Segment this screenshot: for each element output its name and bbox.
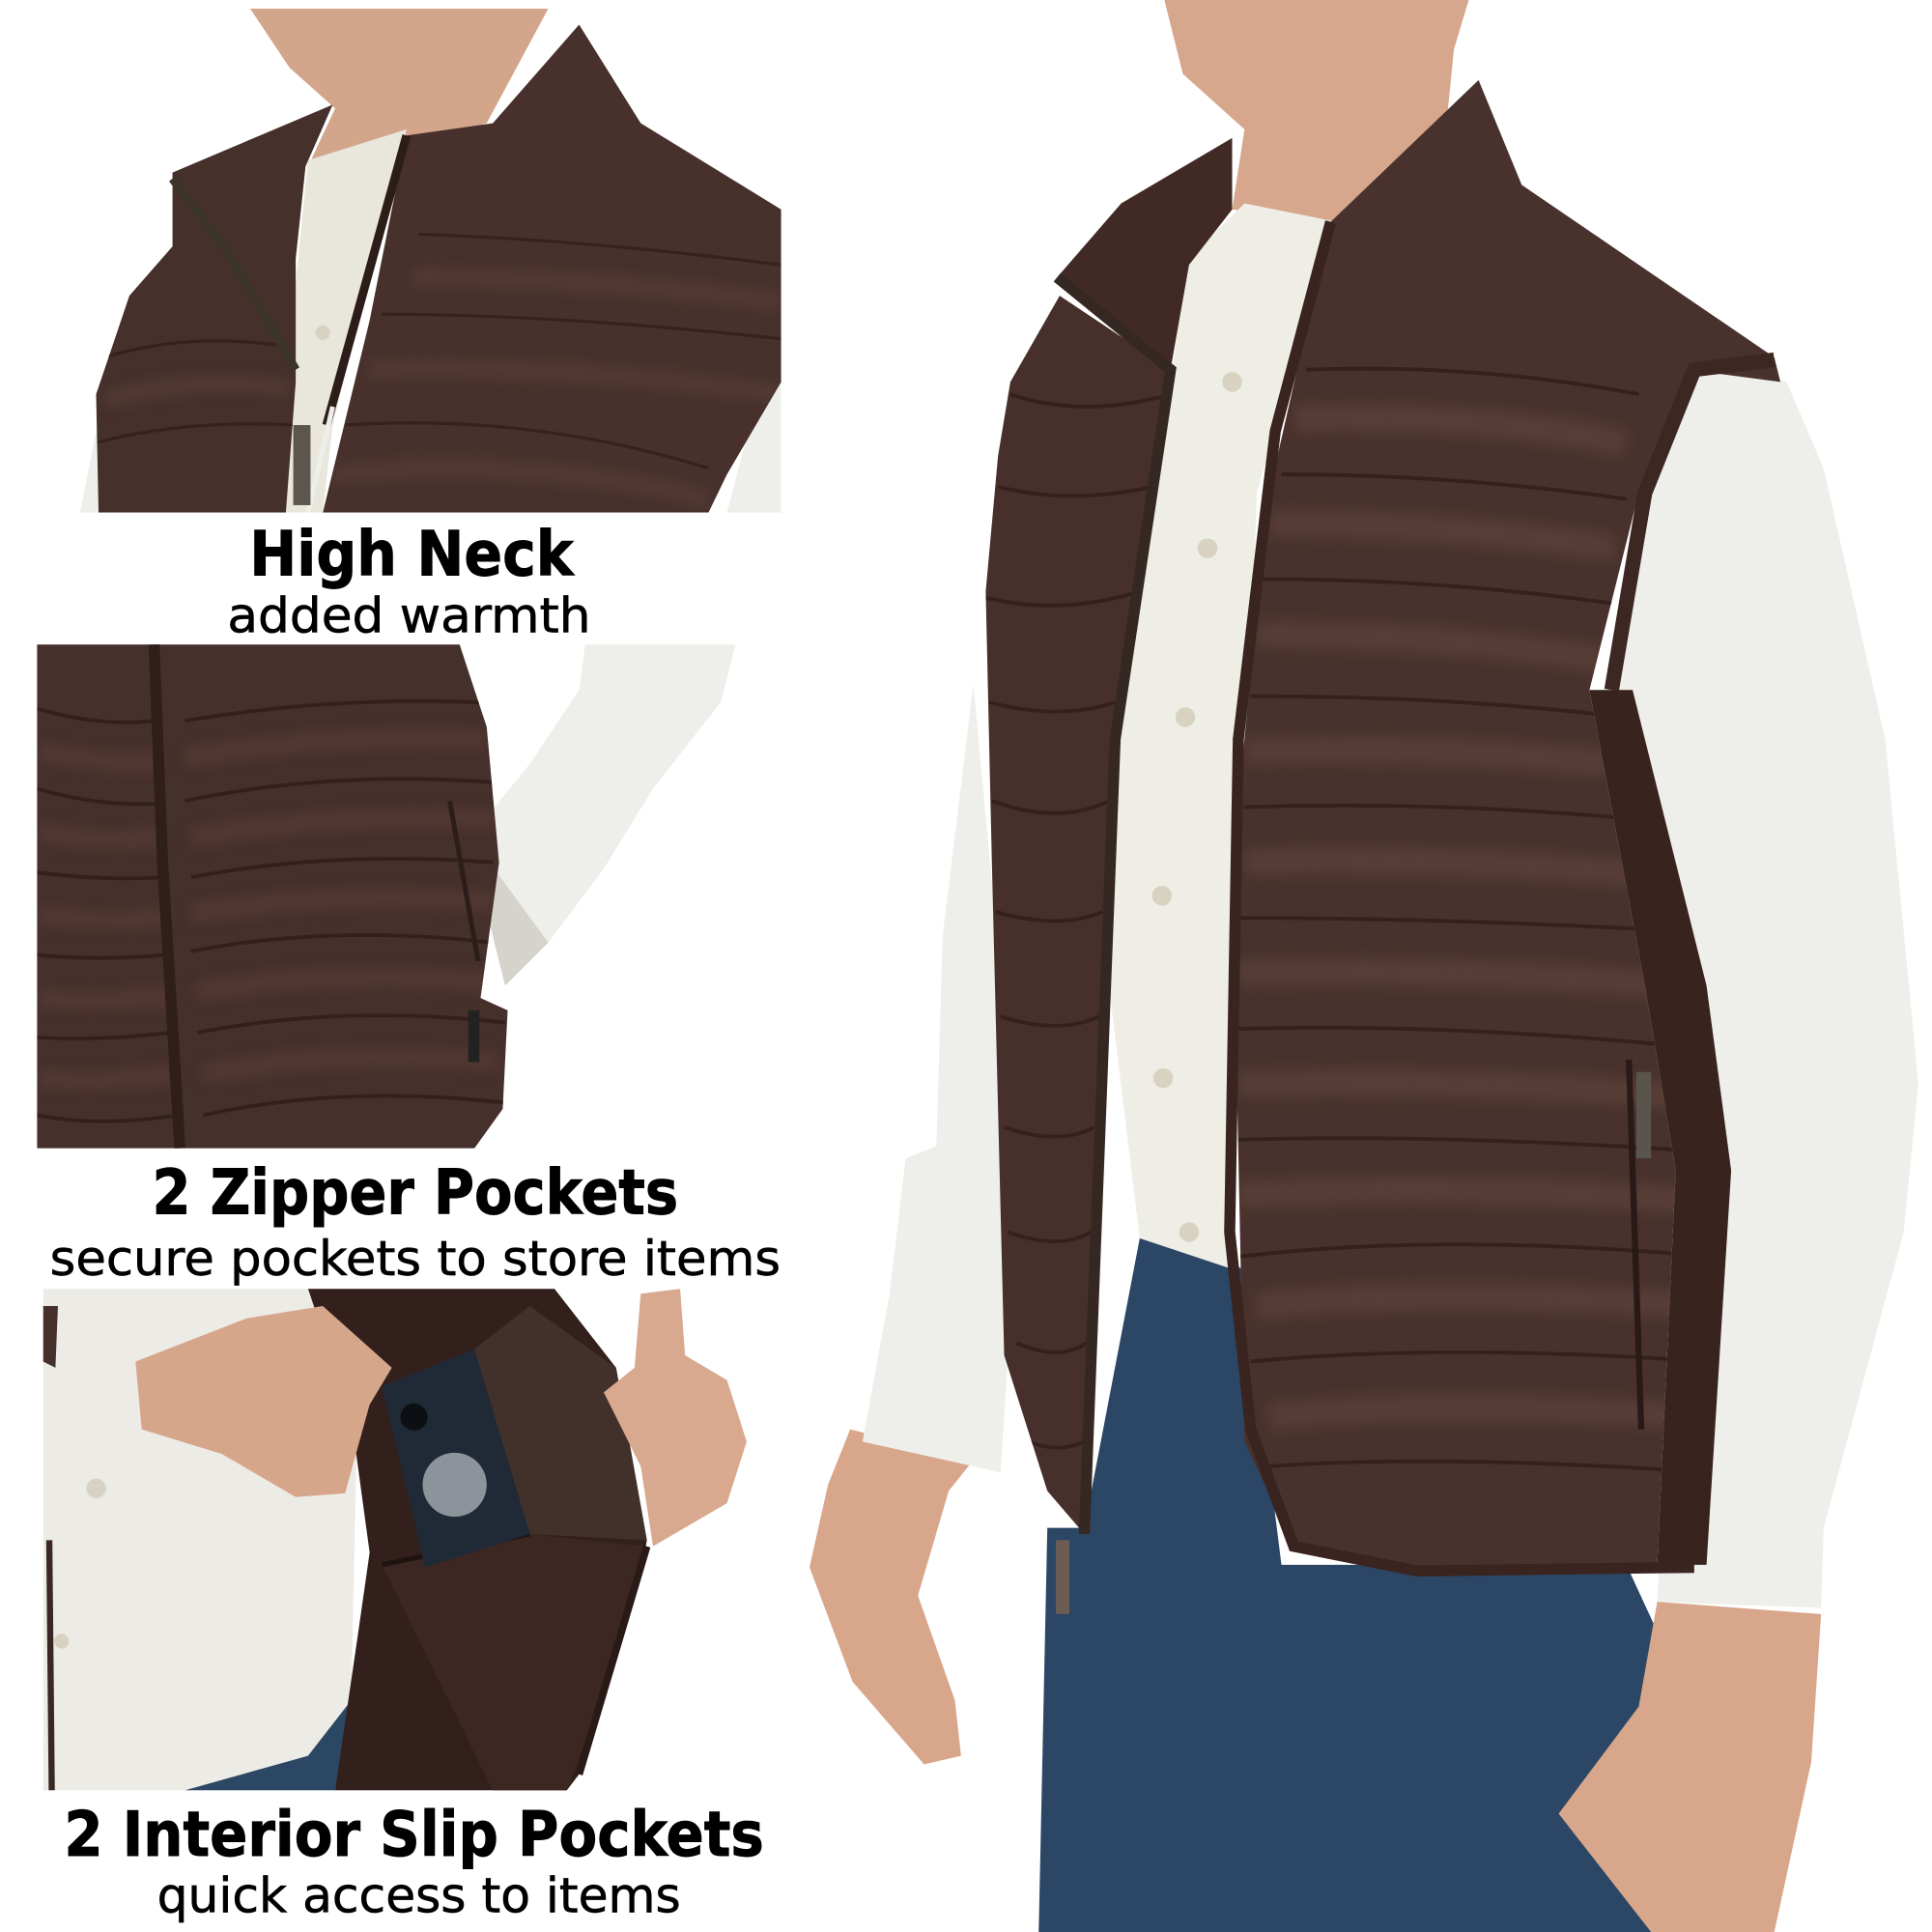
vest left panel [985, 296, 1171, 1534]
pocket zipper [1629, 1060, 1641, 1430]
heading: zipper pockets: 2 Zipper Pockets [153, 1157, 678, 1229]
left hand [810, 1430, 974, 1765]
quilting [985, 369, 1713, 1472]
heading: high neck: High Neck [249, 520, 575, 591]
icon: phone [382, 1350, 529, 1567]
left sleeve [863, 684, 1016, 1472]
right hand [1559, 1602, 1821, 1932]
vest side panel [1589, 690, 1731, 1565]
zippers [1230, 222, 1694, 1571]
panel: high neck photo [80, 9, 781, 513]
text: quick access: quick access to items [157, 1868, 681, 1924]
vest right panel [1233, 80, 1780, 1571]
heading: interior slip pockets: 2 Interior Slip Pockets [64, 1800, 764, 1871]
panel: main model photo [810, 0, 1918, 1932]
right sleeve [1608, 363, 1918, 1608]
shirt front [1109, 203, 1337, 1269]
hem zipper pull [1056, 1540, 1069, 1614]
jeans [1038, 1238, 1707, 1932]
face and neck [1164, 0, 1468, 222]
panel: zipper pockets photo [37, 644, 735, 1149]
collar left [1057, 138, 1233, 370]
text: secure pockets: secure pockets to store items [50, 1231, 781, 1287]
panel: interior slip pockets photo [43, 1289, 747, 1790]
text: added warmth: added warmth [227, 587, 591, 643]
